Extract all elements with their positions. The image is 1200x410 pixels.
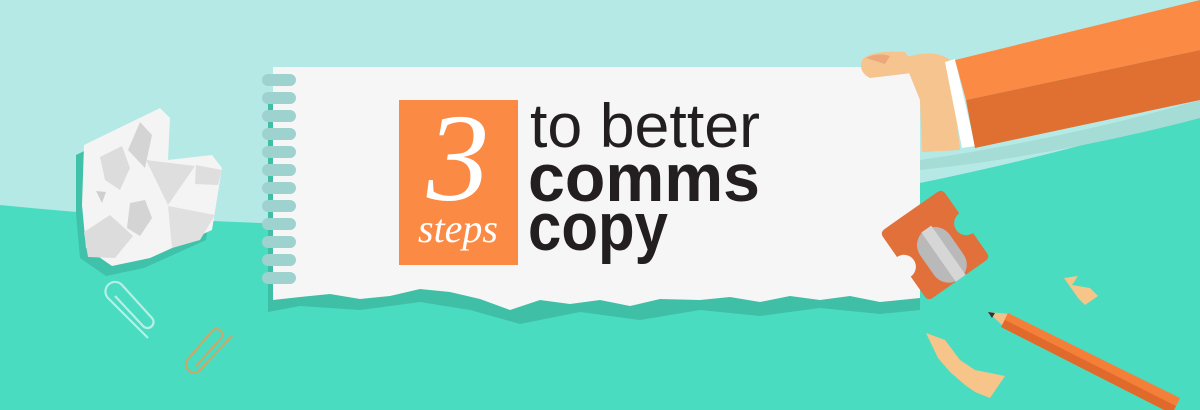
icon: paperclip brown — [186, 329, 232, 373]
title text — [528, 92, 760, 265]
title text: copy — [528, 189, 668, 265]
title badge: 3 steps: steps — [418, 206, 498, 251]
icon: shavings — [926, 276, 1098, 398]
icon: hand and sleeve — [861, 0, 1200, 170]
icon: pencil — [988, 312, 1180, 410]
title text: to better — [530, 92, 760, 161]
spiral rings — [262, 74, 296, 284]
title badge: 3 steps — [399, 90, 518, 265]
panel: torn notebook paper — [262, 67, 920, 324]
icon: crumpled paper ball — [76, 108, 222, 276]
icon: paperclip light — [105, 282, 154, 338]
title text: comms — [528, 140, 760, 216]
icon: pencil sharpener — [880, 189, 990, 301]
title badge: 3 steps: 3 — [426, 90, 489, 228]
